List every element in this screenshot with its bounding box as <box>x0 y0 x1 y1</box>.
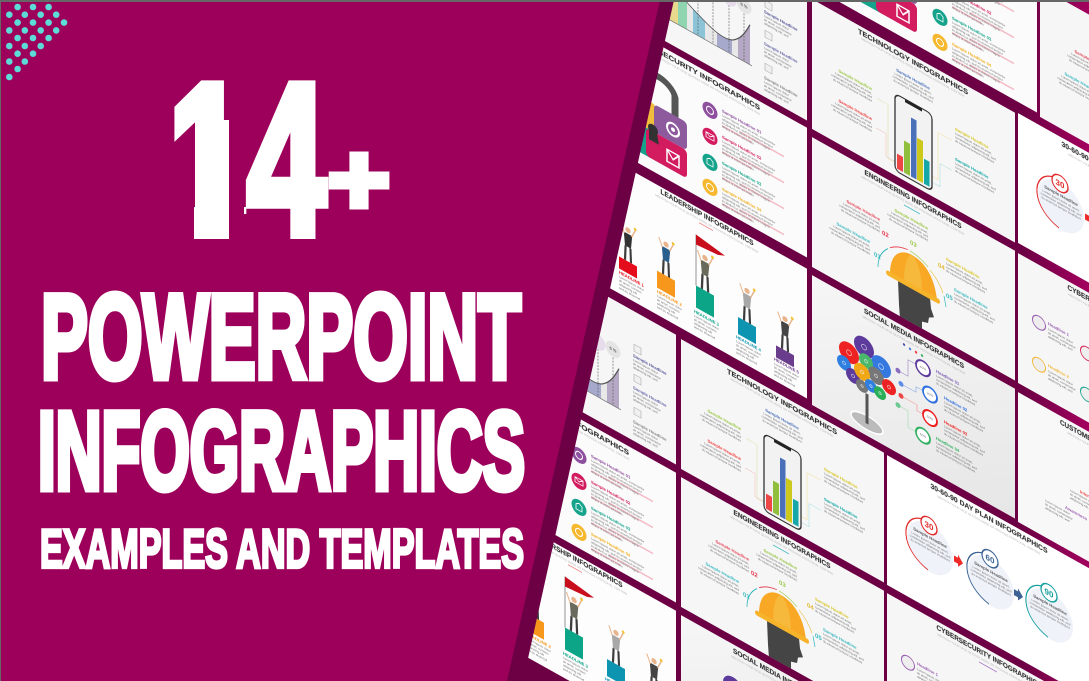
heading: 14+: + <box>328 124 390 236</box>
heading: POWERPOINT: POWERPOINT <box>41 270 521 404</box>
slide: 30-60-90 plan, upper <box>1018 113 1089 357</box>
slide: leadership, upper <box>604 155 807 399</box>
heading: 14+: 14 <box>168 38 326 280</box>
slide: engineering, upper <box>812 137 1015 383</box>
slide: chart, lower <box>473 221 676 465</box>
slide: leadership, lower <box>473 497 676 681</box>
slide collage <box>473 0 1089 681</box>
slide: customer, upper <box>1018 392 1089 636</box>
slide: technology, lower <box>681 339 884 583</box>
subheading: EXAMPLES AND TEMPLATES: EXAMPLES AND TEMPLATES <box>40 518 524 580</box>
icon: dot pattern <box>6 4 67 80</box>
slide: technology, upper <box>812 0 1015 243</box>
crimson title panel <box>0 0 660 681</box>
slide: social media, lower <box>681 615 884 681</box>
slide: cybersecurity, lower <box>887 593 1089 681</box>
slide: social media, upper <box>812 275 1015 519</box>
slide: security, top <box>834 0 1037 113</box>
slide: security, upper <box>604 14 807 258</box>
dark diagonal band <box>0 0 674 681</box>
slide: engineering, top right <box>1040 0 1089 233</box>
slide: cybersecurity, upper <box>1018 253 1089 497</box>
frame edge <box>0 0 2 681</box>
slide: chart, upper <box>604 0 807 121</box>
slide: security, lower <box>473 359 676 603</box>
slide: 30-60-90 plan, lower <box>887 455 1089 681</box>
slide: engineering, lower <box>681 477 884 681</box>
heading: INFOGRAPHICS: INFOGRAPHICS <box>38 390 525 513</box>
